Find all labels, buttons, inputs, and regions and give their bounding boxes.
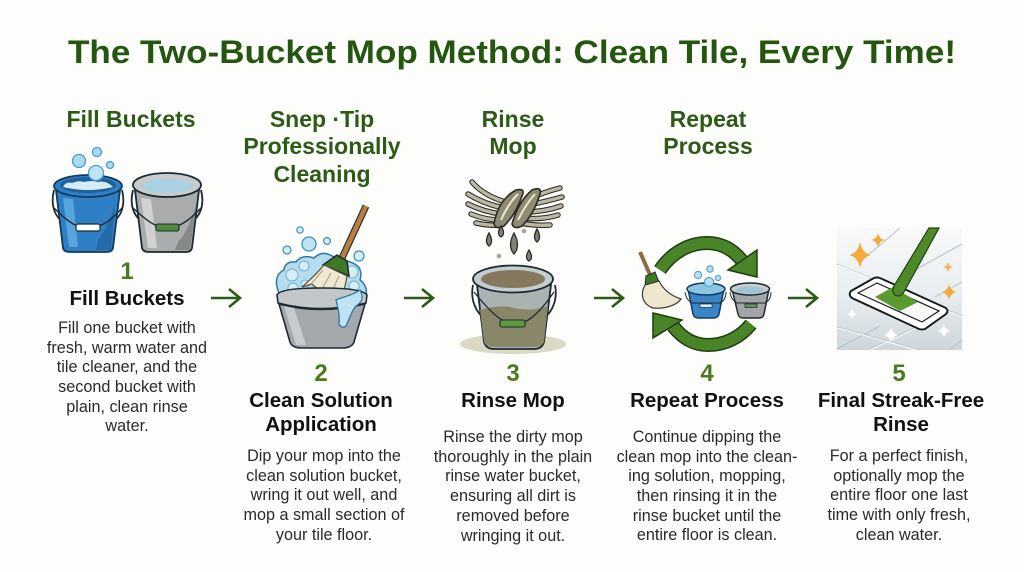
heading: step 3: Rinse	[482, 106, 544, 132]
heading: step 2: Cleaning	[273, 161, 371, 187]
arrow 4 to 5	[788, 289, 817, 307]
arrow 1 to 2	[211, 289, 240, 307]
text: step 5: entire floor one last	[830, 486, 968, 504]
text: step 5: clean water.	[856, 526, 942, 544]
text: step 4: clean mop into the clean-	[617, 448, 797, 466]
text: step 2: your tile floor.	[276, 526, 372, 544]
text: step 4: rinse bucket until the	[633, 507, 781, 525]
arrow 3 to 4	[594, 289, 623, 307]
subheading: step 5	[818, 389, 984, 436]
number 1: 1	[120, 258, 134, 285]
heading: step 1: Fill Buckets	[66, 106, 196, 132]
text: step 2: mop a small section of	[243, 506, 405, 524]
arrow 2 to 3	[404, 289, 433, 307]
number 2: 2	[314, 360, 328, 387]
icon: cycle of mop and buckets	[640, 243, 771, 345]
heading: step 4: Process	[663, 133, 753, 159]
subheading: step 2: Application	[265, 413, 377, 436]
text: step 1: tile cleaner, and the	[57, 358, 197, 376]
subheading: step 2	[249, 389, 393, 436]
heading: step 3: Mop	[489, 133, 537, 159]
text: step 1: second bucket with	[58, 378, 196, 396]
text: step 4: then rinsing it in the	[637, 487, 777, 505]
icon: soapy bucket with mop	[276, 206, 367, 348]
subheading: step 2: Clean Solution	[249, 389, 393, 412]
icon: flat mop on shiny tile	[837, 228, 962, 351]
text: step 2: clean solution bucket,	[246, 467, 402, 485]
subheading: step 3: Rinse Mop	[461, 389, 565, 412]
heading: step 4: Repeat	[670, 106, 747, 132]
text: step 4: entire floor is clean.	[637, 526, 777, 544]
text: step 4	[617, 428, 797, 544]
subheading: step 1: Fill Buckets	[69, 287, 185, 310]
subheading: step 5: Final Streak-Free	[818, 389, 984, 412]
heading: step 2: Snep ·Tip	[270, 106, 374, 132]
text: step 4: ing solution, mopping,	[628, 467, 786, 485]
text: step 5: For a perfect finish,	[830, 447, 968, 465]
text: step 3: ensuring all dirt is	[450, 487, 576, 505]
heading: step 3	[482, 106, 544, 159]
subheading: step 5: Rinse	[873, 413, 929, 436]
text: step 1: water.	[104, 417, 149, 435]
text: step 1: Fill one bucket with	[58, 319, 196, 337]
text: step 5	[827, 447, 971, 544]
text: step 5: optionally mop the	[833, 467, 965, 485]
text: step 3	[434, 428, 592, 545]
text: step 3: thoroughly in the plain	[434, 448, 592, 466]
heading: step 2	[243, 106, 401, 187]
text: step 3: removed before	[456, 507, 570, 525]
text: step 5: time with only fresh,	[827, 506, 971, 524]
text: step 3: Rinse the dirty mop	[443, 428, 583, 446]
number 4: 4	[700, 360, 714, 387]
text: step 2: wring it out well, and	[250, 486, 397, 504]
text: step 2	[243, 447, 405, 544]
icon: blue soapy bucket and grey rinse bucket	[53, 148, 202, 252]
title: The Two-Bucket Mop Method: Clean Tile, Every Time!	[68, 34, 956, 70]
text: step 3: rinse water bucket,	[445, 467, 581, 485]
text: step 3: wringing it out.	[460, 527, 565, 545]
number 5: 5	[892, 360, 906, 387]
heading: step 4	[663, 106, 753, 159]
text: step 1: plain, clean rinse	[66, 398, 188, 416]
text: step 1: fresh, warm water and	[47, 339, 207, 357]
heading: step 2: Professionally	[243, 133, 401, 159]
text: step 2: Dip your mop into the	[247, 447, 401, 465]
icon: dirty mop rope over bucket	[460, 182, 566, 354]
subheading: step 4: Repeat Process	[630, 389, 784, 412]
text: step 1	[47, 319, 207, 435]
text: step 4: Continue dipping the	[633, 428, 781, 446]
number 3: 3	[506, 360, 520, 387]
